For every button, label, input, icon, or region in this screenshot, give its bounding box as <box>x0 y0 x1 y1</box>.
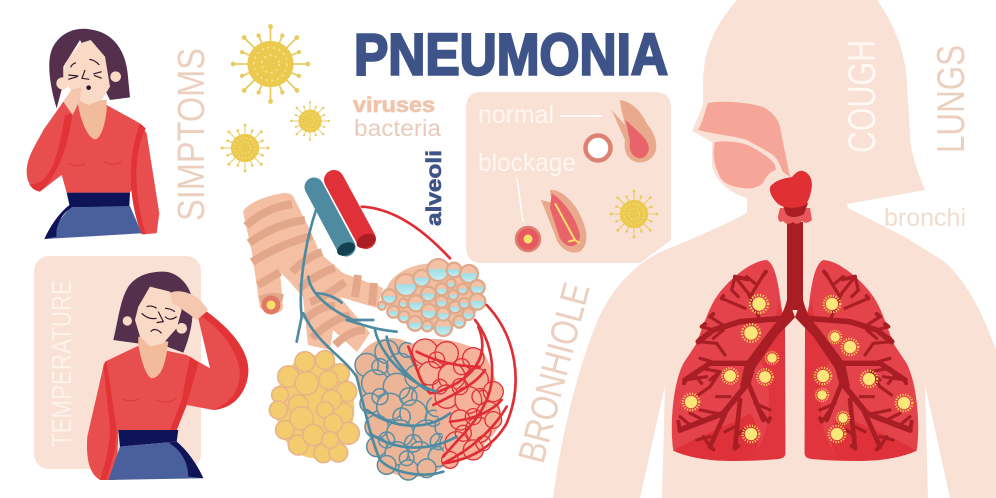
icon: small virus right <box>290 101 330 141</box>
icon: larynx <box>770 171 812 310</box>
oral cavity <box>714 141 776 188</box>
label: alveoli: alveoli <box>423 150 446 226</box>
label: viruses: viruses <box>353 94 435 117</box>
vessel: red artery <box>334 180 378 251</box>
title: PNEUMONIA <box>354 22 668 88</box>
nasal cavity <box>698 102 790 177</box>
icon: blocked airway tube <box>541 190 586 252</box>
vessel: teal vein <box>314 187 357 258</box>
label: bacteria: bacteria <box>354 115 441 141</box>
heading: lungs: LUNGS <box>930 45 973 153</box>
figure: woman with fever <box>87 272 248 480</box>
blue alveoli cluster <box>378 259 485 336</box>
figure: woman coughing <box>27 29 159 239</box>
label: bronchi: bronchi <box>884 204 966 232</box>
pointer line: normal <box>560 115 602 117</box>
right lung <box>795 260 918 461</box>
mesh alveoli: red side <box>410 339 503 468</box>
blood vessels: teal branches <box>297 210 457 475</box>
icon: virus in panel <box>610 190 658 238</box>
bronchial tube <box>243 193 383 352</box>
mesh alveoli: teal side <box>355 338 460 480</box>
icon: normal airway tube <box>612 100 656 162</box>
icon: small virus left <box>221 124 269 172</box>
heading: cough: COUGH <box>841 40 884 153</box>
blood vessels: red branches <box>362 207 516 463</box>
left lung <box>672 260 795 461</box>
viruses in lungs <box>683 295 912 442</box>
icon: normal airway cross-section <box>586 136 610 160</box>
icon: large virus <box>231 24 310 104</box>
heading: temperature: TEMPERATURE <box>46 280 77 447</box>
panel: temperature background <box>34 256 201 469</box>
pointer line: blockage <box>517 178 523 222</box>
icon: blocked airway cross-section <box>516 227 540 251</box>
label: blockage: blockage <box>478 149 576 177</box>
heading: symptoms: SIMPTOMS <box>171 48 213 221</box>
panel: normal and blockage <box>466 92 671 263</box>
label: bronhiole: BRONHIOLE <box>511 279 599 467</box>
body silhouette <box>553 0 996 498</box>
yellow alveoli cluster <box>269 351 359 463</box>
label: normal: normal <box>478 101 554 129</box>
